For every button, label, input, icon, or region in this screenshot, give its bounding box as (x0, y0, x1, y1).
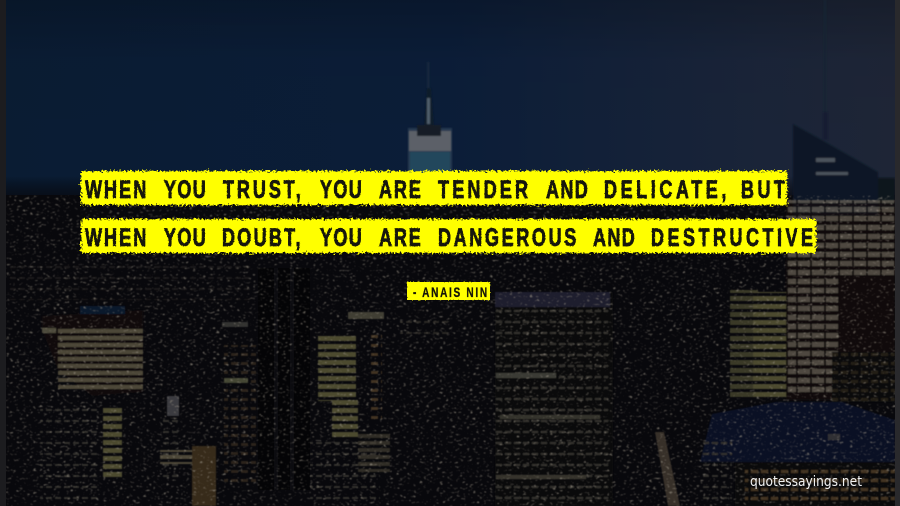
line one: When you trust, you are tender and delicate, but: TENDER (438, 175, 528, 204)
line two: When you doubt, you are dangerous and destructive: AND (593, 223, 635, 252)
left striped office building (42, 306, 143, 396)
right striped towers (730, 200, 895, 402)
diagonal window rows (700, 440, 732, 506)
line one: When you trust, you are tender and delicate, but (85, 175, 786, 204)
line two: When you doubt, you are dangerous and destructive: YOU (320, 223, 362, 252)
green-yellow lit building (318, 312, 384, 440)
narrow yellow lit column (103, 407, 122, 477)
author tag: Anais Nin: - ANAIS NIN (413, 284, 487, 300)
lower left window blocks (10, 260, 450, 506)
line one: When you trust, you are tender and delicate, but: BUT (741, 175, 786, 204)
right skyscraper with antenna (793, 0, 895, 215)
line two: When you doubt, you are dangerous and destructive: DESTRUCTIVE (651, 223, 813, 252)
line one: When you trust, you are tender and delicate, but: DELICATE, (604, 175, 726, 204)
line two: When you doubt, you are dangerous and destructive: YOU (164, 223, 206, 252)
line one: When you trust, you are tender and delicate, but: ARE (379, 175, 421, 204)
line one: When you trust, you are tender and delicate, but: AND (546, 175, 588, 204)
line one: When you trust, you are tender and delicate, but: WHEN (85, 175, 146, 204)
line one: When you trust, you are tender and delicate, but: YOU (164, 175, 206, 204)
line two: When you doubt, you are dangerous and destructive: ARE (379, 223, 421, 252)
small lit block (160, 396, 192, 480)
mid tower windows (222, 322, 256, 485)
street light trail (655, 432, 680, 506)
line one: When you trust, you are tender and delicate, but: TRUST, (223, 175, 301, 204)
line two: When you doubt, you are dangerous and destructive: DANGEROUS (438, 223, 576, 252)
watermark: quotessayings.net: quotessayings.net (750, 474, 862, 490)
scattered window lights (0, 195, 900, 506)
Empire State tower (408, 62, 452, 176)
quote text (85, 175, 813, 252)
buildings dimmed (10, 200, 895, 506)
line two: When you doubt, you are dangerous and destructive (85, 223, 813, 252)
distant skyline band (0, 195, 900, 506)
quote highlight bars (81, 171, 816, 253)
dark central tower (258, 268, 310, 490)
line two: When you doubt, you are dangerous and destructive: DOUBT, (222, 223, 300, 252)
central office tower (495, 292, 613, 506)
blue rooftop (700, 402, 895, 506)
line one: When you trust, you are tender and delicate, but: YOU (320, 175, 362, 204)
line two: When you doubt, you are dangerous and destructive: WHEN (85, 223, 146, 252)
orange lit tower (192, 446, 216, 506)
